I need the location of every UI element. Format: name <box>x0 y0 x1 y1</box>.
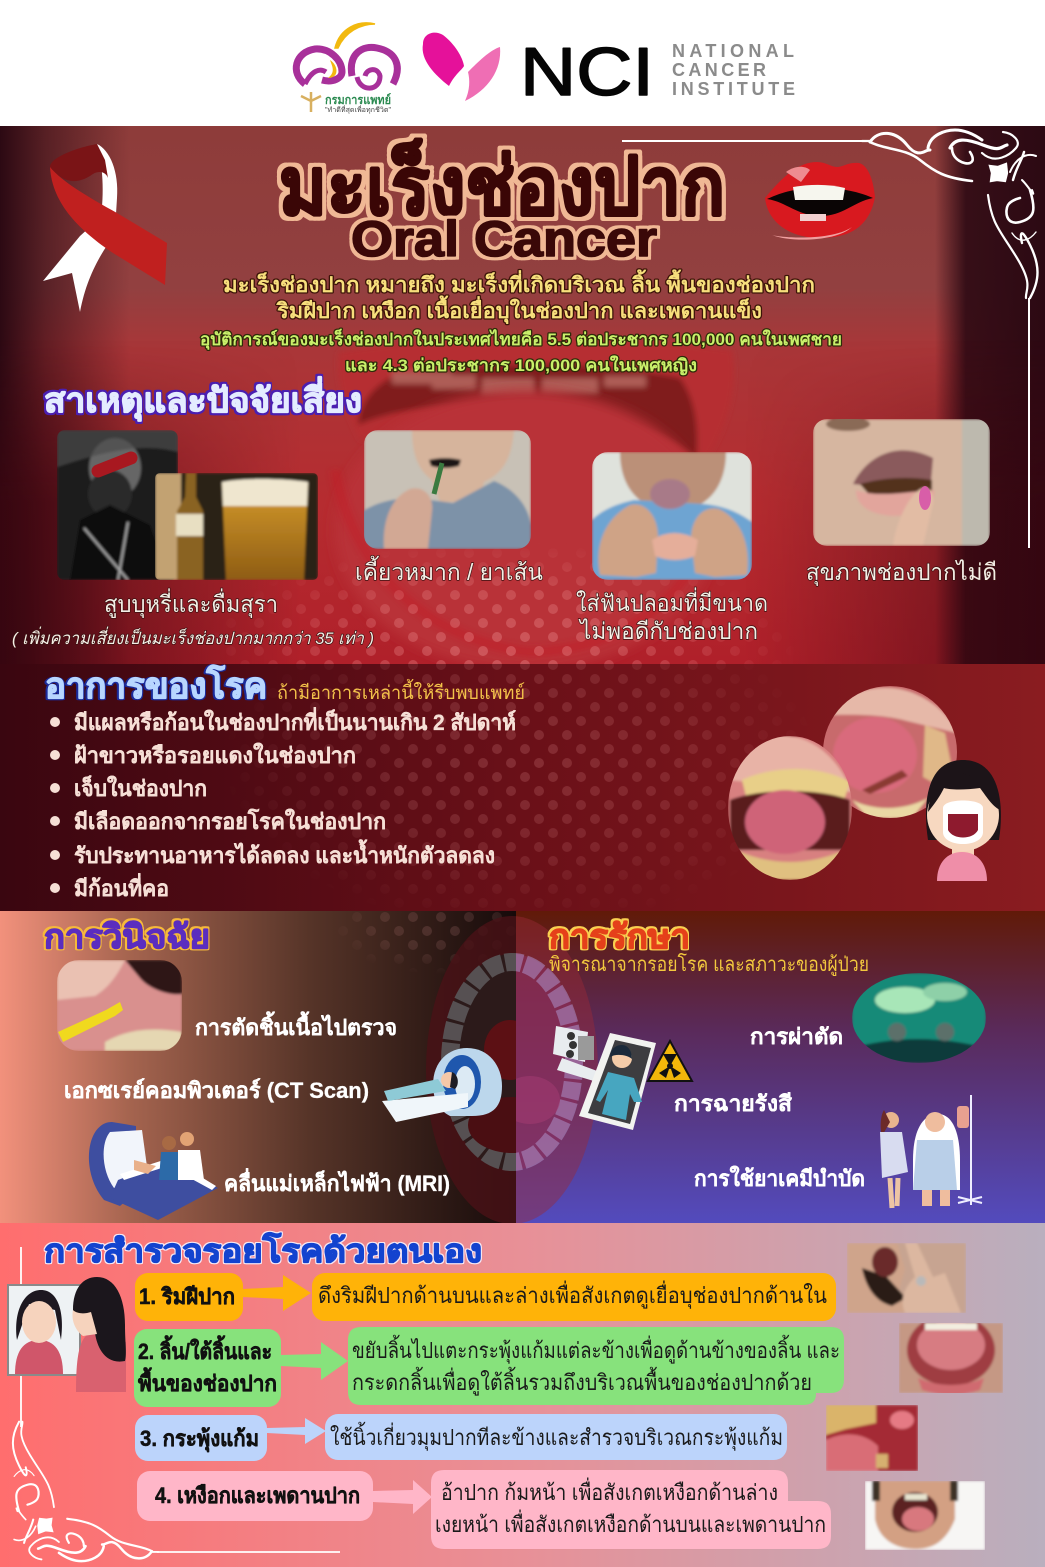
logo: Department of Medical Services <box>296 23 397 114</box>
text block: cause labels <box>12 556 997 648</box>
step 4: 4. เหงือกและเพดานปาก <box>155 1483 360 1508</box>
text block: cause labels: ไม่พอดีกับช่องปาก <box>578 618 758 644</box>
text block: cause labels: สุขภาพช่องปากไม่ดี <box>806 559 997 586</box>
step 2: 2. ลิ้น/ใต้ลิ้นและ <box>138 1335 272 1364</box>
heading: causes and risk factors: สาเหตุและปัจจัยเสี่ยง <box>44 376 362 422</box>
step 3 <box>135 1414 787 1461</box>
illustration: open mouth backdrop <box>330 911 598 1224</box>
photo: smoker <box>57 430 178 580</box>
photo: under tongue check <box>899 1323 1003 1393</box>
label: surgery: การผ่าตัด <box>750 1024 843 1049</box>
step 2: ขยับลิ้นไปแตะกระพุ้งแก้มแต่ละข้างเพื่อดูด้านข้างของลิ้น และ <box>352 1335 840 1364</box>
icon: awareness ribbon <box>43 144 167 312</box>
photo: oral lesion, upper circle <box>820 685 960 820</box>
heading: treatment: การรักษา <box>549 918 690 955</box>
upper lip and open mouth <box>340 339 732 453</box>
heading: self examination: การสำรวจรอยโรคด้วยตนเอง <box>44 1232 482 1269</box>
text block: incidence: อุบัติการณ์ของมะเร็งช่องปากในประเทศไทยคือ 5.5 ต่อประชากร 100,000 คนในเพศชาย <box>200 327 842 350</box>
photo: surgery <box>852 973 986 1063</box>
title: English: Oral Cancer <box>351 211 657 267</box>
illustration: women at a mirror <box>8 1277 126 1392</box>
text block: cause labels: เคี้ยวหมาก / ยาเส้น <box>355 556 543 585</box>
panel: diagnosis background <box>0 911 516 1223</box>
text block: incidence <box>200 327 842 376</box>
ornament: bottom left flourish <box>13 1247 340 1561</box>
label: biopsy: การตัดชิ้นเนื้อไปตรวจ <box>195 1011 397 1040</box>
text block: cause labels: ( เพิ่มความเสี่ยงเป็นมะเร็งช่องปากมากกว่า 35 เท่า ) <box>12 626 374 648</box>
panel: white logo header <box>0 0 1045 125</box>
list: symptoms: มีก้อนที่คอ <box>74 872 169 901</box>
list: symptoms <box>50 706 516 901</box>
list: symptoms: มีแผลหรือก้อนในช่องปากที่เป็นนานเกิน 2 สัปดาห์ <box>74 706 516 735</box>
heading: diagnosis: การวินิจฉัย <box>44 918 210 955</box>
step 4: เงยหน้า เพื่อสังเกตเหงือกด้านบนและเพดานปาก <box>435 1509 826 1537</box>
step 4 <box>137 1470 831 1549</box>
icon: chemotherapy scene <box>880 1095 982 1208</box>
panel: treatment background <box>516 911 1045 1223</box>
step 2: กระดกลิ้นเพื่อดูใต้ลิ้นรวมถึงบริเวณพื้นของช่องปากด้วย <box>352 1367 812 1396</box>
text block: incidence: และ 4.3 ต่อประชากร 100,000 คนในเพศหญิง <box>345 355 697 376</box>
icon: radiotherapy machine <box>553 1026 656 1130</box>
text block: definition <box>223 269 815 325</box>
logo: NCI wordmark: NATIONAL <box>672 41 794 61</box>
icon: CT scanner <box>382 1048 502 1122</box>
step 2: พื้นของช่องปาก <box>138 1367 277 1396</box>
label: CT scan: เอกซเรย์คอมพิวเตอร์ (CT Scan) <box>64 1078 369 1103</box>
text block: definition: ริมฝีปาก เหงือก เนื้อเยื่อบุในช่องปาก และเพดานแข็ง <box>275 295 762 325</box>
icon: red lips <box>765 162 875 240</box>
icon: girl with open mouth <box>926 760 1001 881</box>
logo: NCI wordmark: INSTITUTE <box>672 79 795 99</box>
list: symptoms: มีเลือดออกจากรอยโรคในช่องปาก <box>74 808 386 834</box>
logo: NCI wordmark <box>520 34 795 110</box>
ornament: top right flourish <box>622 130 1038 548</box>
panel: symptoms <box>0 664 1045 911</box>
photo: oral lesion, lower circle <box>728 735 852 880</box>
label: radiation: การฉายรังสี <box>674 1091 793 1116</box>
icon: radiation warning <box>648 1041 692 1081</box>
photo: lip check <box>847 1243 966 1313</box>
subheading: see a doctor: ถ้ามีอาการเหล่านี้ให้รีบพบแพทย์ <box>277 679 525 704</box>
step 1: 1. ริมฝีปาก <box>139 1284 235 1309</box>
list: symptoms: เจ็บในช่องปาก <box>74 774 207 801</box>
photo: beer <box>155 473 318 580</box>
logo: NCI wordmark: NCI <box>520 34 654 110</box>
heading: symptoms: อาการของโรค <box>45 664 267 706</box>
step 3: 3. กระพุ้งแก้ม <box>140 1426 259 1453</box>
label: chemotherapy: การใช้ยาเคมีบำบัด <box>694 1165 865 1191</box>
step 4: อ้าปาก ก้มหน้า เพื่อสังเกตเหงือกด้านล่าง <box>441 1477 778 1505</box>
step 1 <box>135 1273 836 1321</box>
logo: pink NCI symbol <box>423 33 500 101</box>
photo: chewing betel <box>363 430 531 549</box>
photo: dentures <box>592 452 752 580</box>
list: symptoms: ฝ้าขาวหรือรอยแดงในช่องปาก <box>74 742 356 768</box>
panel: self examination <box>0 1223 1045 1567</box>
text block: cause labels: ใส่ฟันปลอมที่มีขนาด <box>576 587 768 616</box>
step 2 <box>134 1327 844 1407</box>
step 3: ใช้นิ้วเกี่ยวมุมปากทีละข้างและสำรวจบริเวณกระพุ้งแก้ม <box>330 1422 783 1451</box>
logo: Department of Medical Services: "ทำดีที่สุดเพื่อทุกชีวิต" <box>325 105 392 114</box>
photo: biopsy <box>57 960 182 1051</box>
text block: cause labels: สูบบุหรี่และดื่มสุรา <box>104 588 278 618</box>
logo: Department of Medical Services: กรมการแพทย์ <box>325 93 391 107</box>
list: symptoms: รับประทานอาหารได้ลดลง และน้ำหนักตัวลดลง <box>74 839 495 868</box>
photo: gum and palate check <box>865 1481 985 1550</box>
photo: cheek check <box>826 1405 918 1471</box>
subheading: treatment considerations: พิจารณาจากรอยโรค และสภาวะของผู้ป่วย <box>549 953 869 977</box>
step 1: ดึงริมฝีปากด้านบนและล่างเพื่อสังเกตดูเยื่อบุช่องปากด้านใน <box>318 1280 827 1309</box>
panel: title and causes photographic background <box>0 126 1045 670</box>
title: Thai: มะเร็งช่องปาก <box>279 138 725 231</box>
text block: definition: มะเร็งช่องปาก หมายถึง มะเร็งที่เกิดบริเวณ ลิ้น พื้นของช่องปาก <box>223 269 815 297</box>
icon: MRI scene <box>89 1122 218 1220</box>
logo: NCI wordmark: CANCER <box>672 60 766 80</box>
photo: poor oral health <box>813 417 990 546</box>
label: MRI: คลื่นแม่เหล็กไฟฟ้า (MRI) <box>224 1167 450 1196</box>
